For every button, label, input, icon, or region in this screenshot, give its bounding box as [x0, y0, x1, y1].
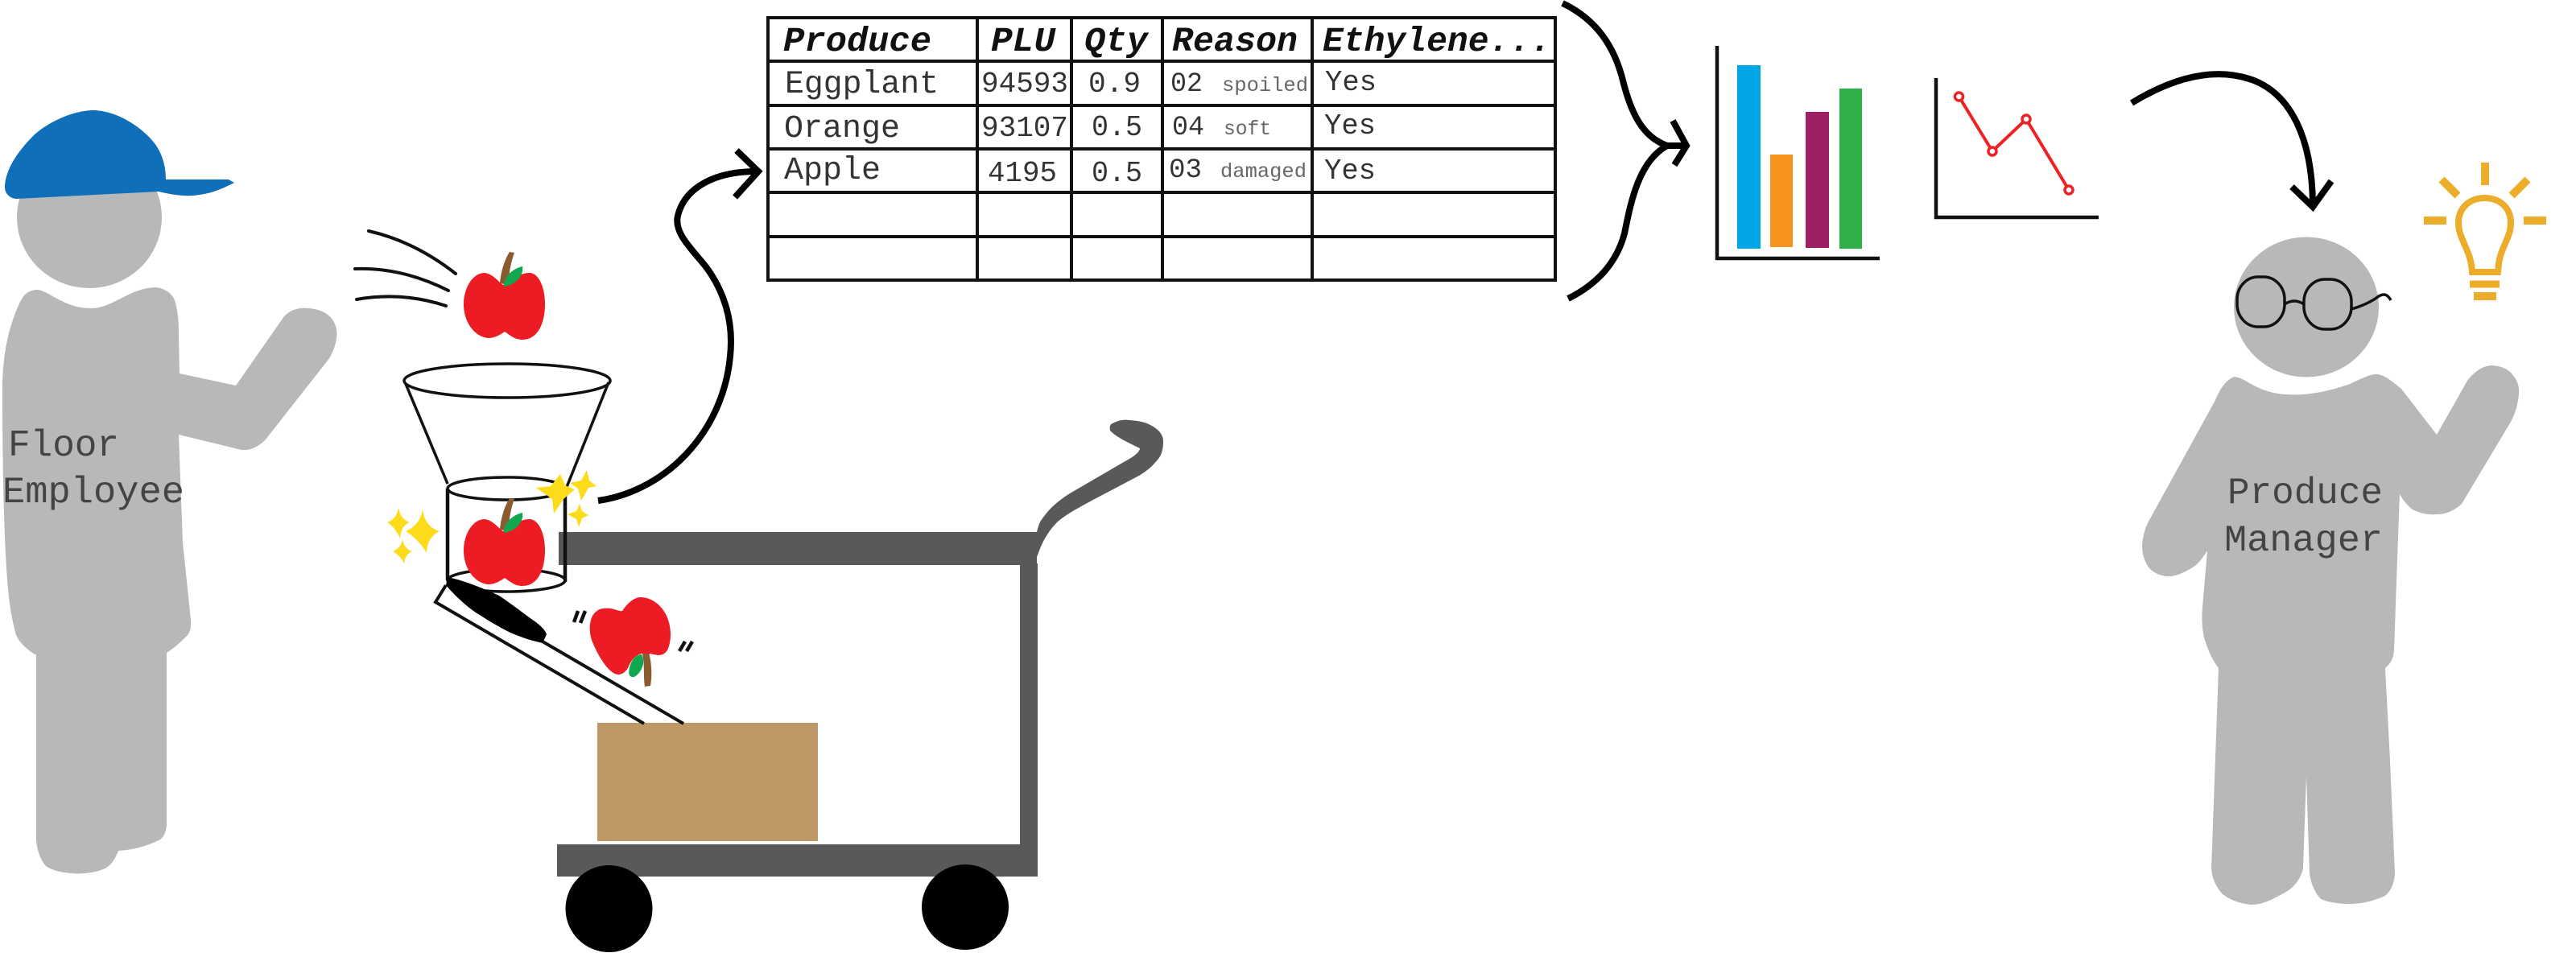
table row: orange: 0.5 — [1092, 111, 1142, 144]
table header — [783, 22, 1551, 61]
table row: orange: 04 — [1172, 113, 1204, 143]
table row: eggplant — [785, 66, 1377, 103]
table row: orange — [784, 109, 1376, 147]
bars — [1737, 65, 1761, 249]
apple: in scanner — [464, 498, 545, 586]
cart upright — [1020, 563, 1038, 847]
label: floor employee — [2, 425, 184, 514]
chute — [436, 585, 683, 724]
arrow: table to charts — [1563, 3, 1686, 299]
table row: eggplant: 0.9 — [1088, 68, 1141, 101]
cart bottom bar — [557, 844, 1038, 877]
arrow: charts to manager — [2132, 74, 2331, 207]
table row: eggplant: 94593 — [981, 68, 1068, 101]
table row: eggplant: Yes — [1325, 66, 1377, 99]
manager body — [2142, 365, 2519, 905]
cart — [557, 420, 1163, 952]
scanner funnel and cylinder — [404, 364, 610, 592]
manager head — [2234, 237, 2379, 377]
table row: eggplant: Eggplant — [785, 67, 939, 103]
label: floor employee: Employee — [2, 472, 184, 514]
red trend line — [1959, 97, 2069, 190]
label: produce manager — [2224, 472, 2383, 562]
table row: apple: 03 — [1169, 155, 1202, 186]
table row: orange: Yes — [1324, 109, 1376, 142]
arrow: scanner to table — [598, 151, 758, 501]
motion ticks around tumbling apple — [574, 611, 692, 651]
table row: orange: 93107 — [981, 112, 1068, 145]
table grid — [768, 18, 1555, 280]
table row: apple: 0.5 — [1092, 157, 1142, 190]
table header: Reason — [1172, 22, 1298, 61]
table row: orange: Orange — [784, 111, 900, 147]
employee body — [2, 287, 336, 873]
icon: lightbulb — [2424, 163, 2546, 296]
table row: apple: Yes — [1324, 155, 1376, 188]
label: floor employee: Floor — [8, 425, 119, 467]
left wheel — [565, 865, 652, 952]
employee head — [17, 146, 162, 288]
sparkles: right — [536, 470, 597, 527]
line chart — [1936, 78, 2099, 217]
table row: eggplant: spoiled — [1222, 74, 1308, 97]
data points — [1955, 93, 2073, 194]
data table — [768, 18, 1555, 280]
black paddle — [446, 577, 547, 643]
table row: orange: soft — [1224, 118, 1271, 141]
apple: thrown — [464, 252, 545, 340]
cart handle — [1037, 420, 1163, 557]
table row: eggplant: 02 — [1170, 69, 1203, 100]
table row: apple: damaged — [1220, 160, 1307, 184]
label: produce manager: Produce — [2227, 472, 2383, 514]
table row: apple: 4195 — [988, 157, 1057, 190]
table header: Ethylene... — [1323, 22, 1551, 61]
glasses — [2237, 277, 2391, 329]
cart top bar — [559, 532, 1037, 565]
table header: Produce — [783, 22, 931, 61]
sparkles: left — [387, 507, 440, 563]
table header: PLU — [991, 22, 1056, 61]
figure: produce manager — [2142, 237, 2519, 905]
table header: Qty — [1084, 22, 1150, 61]
axes — [1717, 46, 1880, 258]
figure: floor employee — [2, 110, 336, 873]
axes — [1936, 78, 2099, 217]
motion lines: thrown apple — [355, 231, 456, 306]
table row: apple: Apple — [784, 153, 881, 189]
right wheel — [922, 864, 1009, 950]
cardboard box — [597, 723, 818, 841]
blue cap — [5, 110, 234, 199]
apple: tumbling down chute — [590, 597, 671, 687]
table row: apple — [784, 153, 1376, 190]
bar chart — [1717, 46, 1880, 258]
label: produce manager: Manager — [2224, 520, 2383, 562]
